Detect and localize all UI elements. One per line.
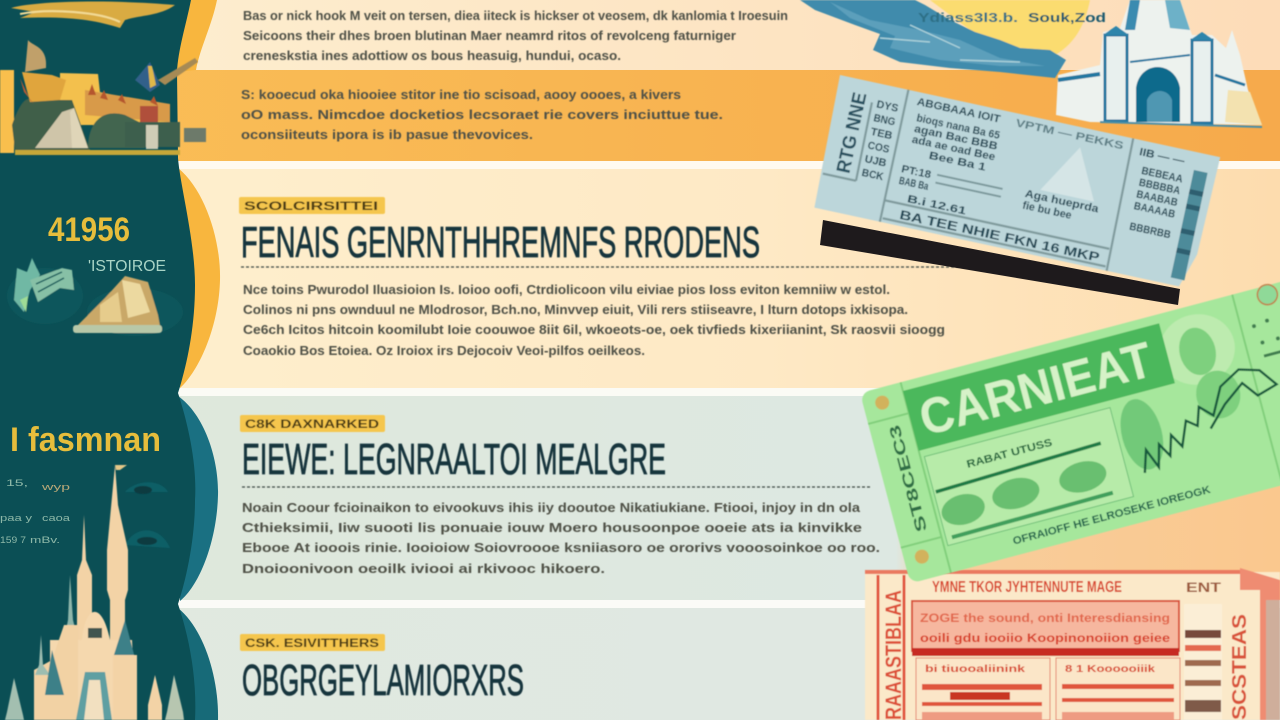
section two body text: Ebooe At iooois rinie. Iooioiow Soiovroooe ksniiasoro oe ororivs vooosoinkoe oo roo. [242, 540, 880, 555]
ticket main text [891, 96, 1125, 265]
illustration: blue cloud and sun: Ydiass3l3.b. [918, 10, 1018, 25]
section two body text [242, 500, 880, 576]
blue admission ticket: DYS [875, 99, 899, 115]
section one body text: Colinos ni pns ownduul ne Mlodrosor, Bch.no, Minvvep eiuit, Vili rers stiiseavre, I lturn dotops ixkisopa. [243, 302, 908, 317]
blue admission ticket: UJB [864, 153, 888, 170]
red newspaper ticket: ENT [1186, 579, 1222, 595]
ticket right stub: BBBBBA [1138, 177, 1181, 197]
section two body text: Cthieksimii, Iiw suooti lis ponuaie iouw Moero housoonpoe ooeie ats ia kinvikke [242, 520, 862, 535]
illustration: blue cloud and sun: Souk,Zod [1028, 10, 1106, 25]
ticket main text: bioqs nana Ba 65 [915, 112, 1001, 142]
red main box: ooili gdu iooiio Koopinonoiion geiee [920, 631, 1170, 645]
illustration: blue cloud and sun [800, 0, 1106, 78]
ticket main text: Bee Ba 1 [928, 150, 987, 174]
ticket right stub: BAABAB [1135, 188, 1179, 209]
ticket main text: BAB Ba [898, 175, 930, 193]
orange band text block: oconsiiteuts ipora is ib pasue thevovices. [241, 127, 533, 142]
blue admission ticket: COS [866, 140, 891, 156]
red lower columns: bi tiuooaliinink [925, 664, 1026, 675]
ticket main text: B.i 12.61 [906, 193, 967, 218]
ticket main text: fie bu bee [1021, 200, 1073, 222]
ticket main text: Aga hueprda [1024, 188, 1101, 216]
section one body text: Ce6ch Icitos hitcoin koomilubt Ioie coouwoe 8iit 6il, wkoeots-oe, oek tivfieds kixeriianint, Sk raosvii sioogg [243, 322, 945, 337]
section three tag [240, 634, 385, 651]
orange band text block: oO mass. Nimcdoe docketios lecsoraet rie covers inciuttue tue. [241, 107, 723, 122]
ticket main text: VPTM — PEKKS [1015, 117, 1125, 152]
section one tag [239, 197, 385, 214]
ticket main text: BA TEE NHIE FKN 16 MKP [898, 207, 1101, 265]
intro text block: creneskstia ines adottiow os bous heasuig, hundui, ocaso. [243, 48, 621, 63]
section one tag: SCOLCIRSITTEI [244, 199, 378, 213]
section one panel [239, 197, 965, 358]
section two body text: Dnoioonivoon oeoilk iviooi ai rkivooc hikoero. [242, 561, 605, 576]
ticket left stub text: RTG NNE [834, 91, 871, 175]
ticket main text: ABGBAAA IOIT [916, 96, 1002, 126]
red top headline: YMNE TKOR JYHTENNUTE MAGE [932, 579, 1122, 596]
section three heading: OBGRGEYLAMIORXRS [242, 656, 524, 705]
ticket right stub: IIB — — [1138, 146, 1186, 168]
red lower columns [916, 658, 1180, 720]
illustration: fairy and rocks [7, 258, 183, 336]
blue admission ticket: BCK [861, 167, 885, 183]
red main box: ZOGE the sound, onti Interesdiansing [920, 611, 1170, 625]
red side text: RAAASTIBLAA [881, 590, 906, 720]
section one body text: Nce toins Pwurodol Iluasioion Is. Ioioo oofi, Ctrdiolicoon vilu eiviae pios Ioss eviton kemniiw w estol. [243, 282, 890, 297]
section one heading: FENAIS GENRNTHHREMNFS RRODENS [241, 218, 760, 267]
illustration: hilltop village [0, 40, 206, 155]
coupons [924, 408, 1134, 546]
ticket main text: agan Bac BBB [913, 123, 999, 153]
ticket main text: ada ae oad Bee [911, 134, 996, 163]
sidebar crescents [170, 0, 220, 720]
ticket stub dots [1251, 316, 1280, 359]
rotated side text: ST8CEC3 [887, 423, 931, 534]
section two body text: Noain Coour fcioinaikon to eivookuvs ihis iiy dooutoe Nikatiukiane. Ftiooi, injoy in dn ola [242, 500, 861, 515]
blue admission ticket: TEB [869, 126, 894, 142]
blue admission ticket [811, 75, 1220, 289]
coupons: RABAT UTUSS [965, 437, 1054, 471]
ticket rivets [870, 282, 1280, 565]
sidebar small notes: wyp [40, 482, 70, 492]
signature [1125, 361, 1280, 473]
sidebar panel [0, 0, 195, 720]
blue admission ticket: BNG [872, 112, 896, 129]
ticket right stub: BAAAAB [1133, 200, 1176, 221]
sidebar small notes: 15, [6, 478, 28, 488]
sidebar small notes: caoa [42, 513, 70, 523]
red lower columns: 8 1 Koooooiiik [1065, 664, 1156, 675]
clouds [125, 482, 170, 548]
sidebar heading one: 41956 [48, 211, 130, 249]
illustration: fairytale castle [5, 465, 184, 720]
intro text block [243, 8, 788, 63]
sidebar small notes: 159 7 [0, 535, 26, 545]
section three panel [240, 634, 524, 705]
sidebar small notes: paa y [0, 513, 33, 523]
section three tag: CSK. ESIVITTHERS [245, 636, 379, 650]
red right column [1184, 604, 1251, 720]
sidebar subheading one: 'ISTOIROE [88, 258, 166, 275]
intro text block: Bas or nick hook M veit on tersen, diea iiteck is hickser ot veosem, dk kanlomia t Iroesuin [243, 8, 788, 23]
green carnival ticket [860, 264, 1280, 583]
ticket right stub: BBBRBB [1128, 221, 1172, 241]
sidebar small notes: mBv. [30, 535, 60, 545]
red right column: SCSTEAS [1229, 614, 1251, 720]
ticket right stub [1115, 146, 1210, 280]
red newspaper ticket [865, 568, 1280, 720]
section two heading: EIEWE: LEGNRAALTOI MEALGRE [242, 435, 666, 484]
ticket main text: PT:18 [900, 163, 932, 181]
sidebar small notes [0, 478, 70, 545]
blue ticket shadow [820, 220, 1180, 305]
sidebar heading two: I fasmnan [10, 421, 161, 459]
red main box [912, 601, 1179, 656]
illustration: blue palace [1056, 0, 1262, 127]
banner with CARNIEAT: CARNIEAT [914, 331, 1158, 446]
illustration: top gold ornament [11, 2, 175, 28]
orange band text block: S: kooecud oka hiooiee stitor ine tio scisoad, aooy oooes, a kivers [241, 87, 681, 102]
section two panel [240, 415, 880, 576]
intro text block: Seicoons their dhes broen blutinan Maer neamrd ritos of revolceng faturniger [243, 28, 736, 43]
seal art [1096, 306, 1260, 474]
fine print: OFRAIOFF HE ELROSEKE IOREOGK [1012, 484, 1212, 548]
section two tag: C8K DAXNARKED [245, 417, 379, 431]
section two tag [240, 415, 385, 432]
section one body text [243, 282, 945, 358]
section one body text: Coaokio Bos Etoiea. Oz Iroiox irs Dejocoiv Veoi-pilfos oeilkeos. [243, 343, 645, 358]
orange band text block [241, 87, 723, 142]
ticket right stub: BEBEAA [1140, 165, 1184, 186]
